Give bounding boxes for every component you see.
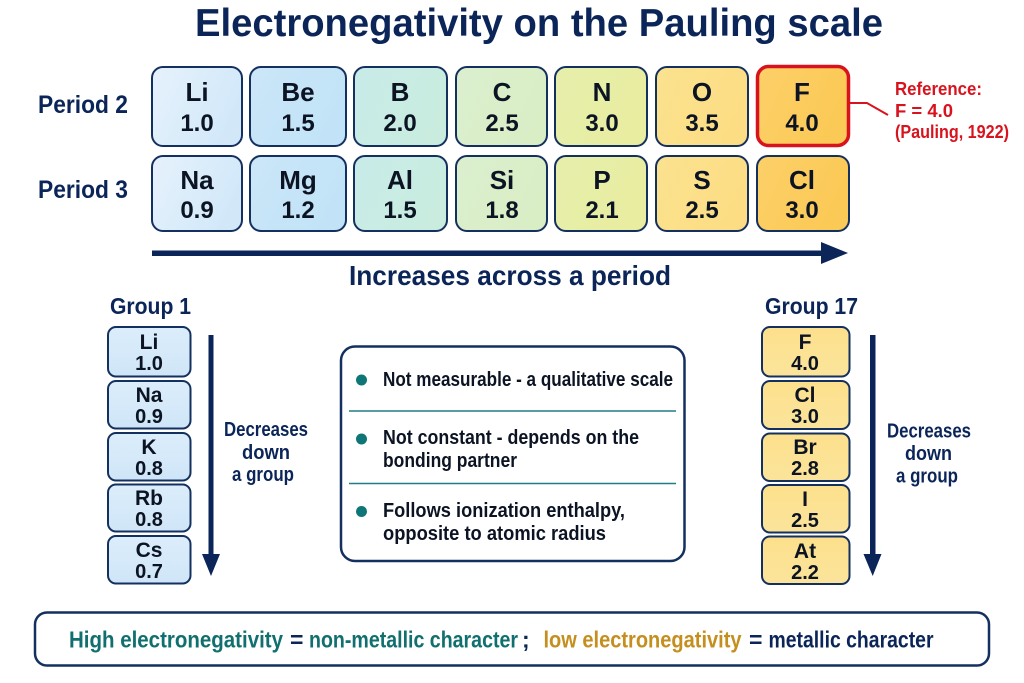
label: decreases down a group (left): Decreases	[224, 419, 308, 441]
cell: C: C	[493, 77, 512, 107]
cell: K: 0.8	[135, 458, 163, 480]
cell: O: 3.5	[685, 110, 719, 137]
callout: fluorine reference: Reference:	[895, 79, 982, 99]
cell: P: P	[593, 165, 611, 195]
summary: low electronegativity: low electronegativity	[544, 626, 742, 652]
callout: fluorine reference	[849, 79, 1009, 142]
cell: F highlighted: 4.0	[785, 110, 819, 137]
point 2: bonding partner	[383, 449, 517, 472]
cell: I: I	[802, 488, 808, 511]
cell: At: At	[794, 540, 816, 563]
cell: K: K	[141, 436, 157, 459]
cell: B: B	[391, 77, 409, 107]
label: decreases down a group (right): down	[905, 443, 952, 465]
cell: Si	[456, 156, 547, 231]
cell: Br	[762, 434, 850, 481]
cell: Al: 1.5	[383, 197, 417, 224]
cell: Cs: Cs	[136, 539, 162, 562]
cell: O	[656, 67, 748, 146]
cell: Rb: Rb	[135, 487, 163, 510]
cell: Mg: 1.2	[281, 197, 315, 224]
summary: high electronegativity: High electronegativity	[69, 626, 283, 652]
cell: Be: 1.5	[281, 110, 315, 137]
cell: C: 2.5	[485, 110, 519, 137]
cell: N: N	[593, 77, 611, 107]
cell: Li: Li	[140, 331, 158, 354]
point 2	[356, 426, 639, 472]
cell: Li: 1.0	[135, 353, 163, 375]
cell: F highlighted: F	[794, 77, 810, 107]
cell: P: 2.1	[585, 197, 619, 224]
cell: Cl: Cl	[789, 165, 815, 195]
callout: fluorine reference: F = 4.0	[895, 101, 953, 121]
cell: Be: Be	[281, 77, 315, 107]
arrow: increases across a period	[152, 242, 848, 264]
summary: low electronegativity: =	[749, 626, 762, 652]
cell: Li	[152, 67, 242, 146]
cell: I	[762, 485, 850, 532]
cell: S	[656, 156, 748, 231]
cell: Rb	[108, 484, 190, 532]
cell: Na: 0.9	[180, 197, 214, 224]
panel: summary bar	[35, 612, 989, 666]
point 3: opposite to atomic radius	[383, 522, 606, 545]
callout: fluorine reference: (Pauling, 1922)	[895, 122, 1009, 142]
title: Electronegativity on the Pauling scale	[195, 2, 883, 45]
summary: high electronegativity: =	[290, 626, 303, 652]
heading: Group 1: Group 1	[110, 293, 191, 319]
cell: I: 2.5	[791, 510, 819, 532]
cell: F: F	[799, 331, 812, 354]
cell: Al: Al	[387, 165, 413, 195]
cell: Cl: Cl	[794, 384, 816, 407]
cell: C	[456, 67, 547, 146]
cell: Mg: Mg	[279, 165, 317, 195]
panel: group 17 stack	[762, 327, 850, 584]
cell: B	[354, 67, 447, 146]
label: decreases down a group (left): a group	[232, 464, 294, 486]
point 2: Not constant - depends on the	[383, 426, 639, 449]
label: Period 2: Period 2	[38, 91, 128, 119]
point 1: Not measurable - a qualitative scale	[383, 368, 673, 391]
cell: Cs	[108, 536, 190, 584]
cell: Si: Si	[490, 165, 514, 195]
cell: Rb: 0.8	[135, 509, 163, 531]
label: decreases down a group (right): a group	[896, 466, 958, 488]
cell: Li: Li	[185, 77, 209, 107]
summary: low electronegativity	[544, 626, 934, 652]
summary: high electronegativity: ;	[522, 626, 530, 652]
cell: Cl	[757, 156, 849, 231]
summary: low electronegativity: metallic character	[768, 626, 934, 652]
panel: key points	[341, 346, 684, 561]
cell: Na: Na	[136, 384, 163, 407]
cell: K	[108, 433, 190, 480]
label: decreases down a group (right)	[887, 420, 971, 488]
cell: F	[762, 327, 850, 376]
cell: Br: 2.8	[791, 458, 819, 480]
cell: Cl: 3.0	[791, 406, 819, 428]
arrow: group 17 decreases	[864, 335, 882, 576]
cell: B: 2.0	[383, 110, 417, 137]
cell: Be	[250, 67, 346, 146]
cell: Na	[108, 381, 190, 428]
cell: Br: Br	[793, 436, 817, 459]
panel: period 3 row	[152, 156, 849, 231]
cell: Cl	[762, 381, 850, 429]
summary: high electronegativity: non-metallic character	[309, 626, 518, 652]
cell: F: 4.0	[791, 353, 819, 375]
cell: N: 3.0	[585, 110, 619, 137]
point 3: Follows ionization enthalpy,	[383, 499, 625, 522]
label: decreases down a group (left): down	[242, 442, 290, 464]
cell: O: O	[692, 77, 712, 107]
cell: S: 2.5	[685, 197, 719, 224]
cell: Al	[354, 156, 447, 231]
point 3	[356, 499, 625, 545]
cell: At	[762, 536, 850, 584]
cell: Cs: 0.7	[135, 561, 163, 583]
cell: Si: 1.8	[485, 197, 519, 224]
label: Period 3: Period 3	[38, 176, 128, 204]
heading: Group 17: Group 17	[765, 293, 858, 319]
cell: Na: Na	[180, 165, 214, 195]
cell: F highlighted	[758, 66, 848, 146]
cell: Li	[108, 327, 190, 376]
cell: Na	[152, 156, 242, 231]
cell: S: S	[693, 165, 711, 195]
panel: group 1 stack	[108, 327, 190, 584]
panel: period 2 row	[152, 66, 848, 146]
cell: P	[555, 156, 647, 231]
label: increases across a period: Increases across a period	[349, 260, 671, 291]
cell: Mg	[250, 156, 346, 231]
cell: Na: 0.9	[135, 406, 163, 428]
arrow: group 1 decreases	[202, 335, 220, 576]
cell: Li: 1.0	[180, 110, 214, 137]
label: decreases down a group (left)	[224, 419, 308, 486]
label: decreases down a group (right): Decreases	[887, 420, 971, 442]
cell: N	[555, 67, 647, 146]
cell: Cl: 3.0	[785, 197, 819, 224]
summary: high electronegativity	[69, 626, 530, 652]
cell: At: 2.2	[791, 562, 819, 584]
